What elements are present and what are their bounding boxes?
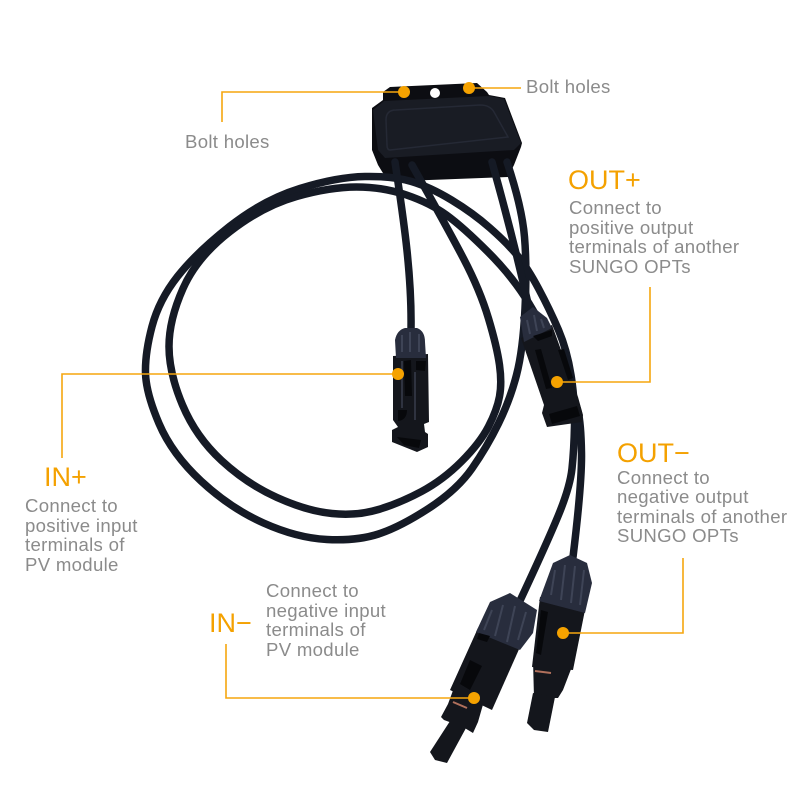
connector: OUT+ [520, 307, 583, 427]
callout: OUT-: negative output [617, 486, 749, 507]
callout: OUT+ [551, 165, 739, 388]
connector: OUT- [527, 555, 592, 732]
connector: IN- [430, 593, 537, 763]
connector: IN+ [392, 328, 429, 452]
cables [145, 162, 582, 605]
callout: OUT+: OUT+ [568, 165, 641, 195]
callout: IN-: IN− [209, 608, 252, 638]
callout: OUT-: Connect to [617, 467, 710, 488]
cable: to OUT+ [492, 162, 530, 312]
callout: OUT-: SUNGO OPTs [617, 525, 739, 546]
junction box [372, 83, 522, 181]
callout: IN-: Connect to [266, 580, 359, 601]
callout: IN+: IN+ [44, 462, 87, 492]
callout: OUT-: terminals of another [617, 506, 787, 527]
callout: bolt holes right [463, 76, 611, 97]
callout: OUT+: Connect to [569, 197, 662, 218]
callout: OUT-: OUT− [617, 438, 690, 468]
callout: OUT+: terminals of another [569, 236, 739, 257]
callout: IN+: positive input [25, 515, 138, 536]
cable: inner loop [169, 165, 582, 557]
callout: bolt holes left [185, 86, 410, 152]
cable: outer loop [145, 162, 575, 605]
callout: OUT+: positive output [569, 217, 694, 238]
callout: IN- [209, 580, 480, 704]
callout: IN-: terminals of [266, 619, 366, 640]
callout: OUT- [557, 438, 787, 639]
callout: IN-: PV module [266, 639, 360, 660]
callout: IN+: Connect to [25, 495, 118, 516]
callout: IN+ [25, 368, 404, 575]
callout: OUT+: SUNGO OPTs [569, 256, 691, 277]
callout: IN+: PV module [25, 554, 119, 575]
callout: bolt holes left: Bolt holes [185, 131, 270, 152]
callout: bolt holes right: Bolt holes [526, 76, 611, 97]
callout: IN-: negative input [266, 600, 387, 621]
cable: to IN+ [395, 162, 411, 330]
callout: IN+: terminals of [25, 534, 125, 555]
